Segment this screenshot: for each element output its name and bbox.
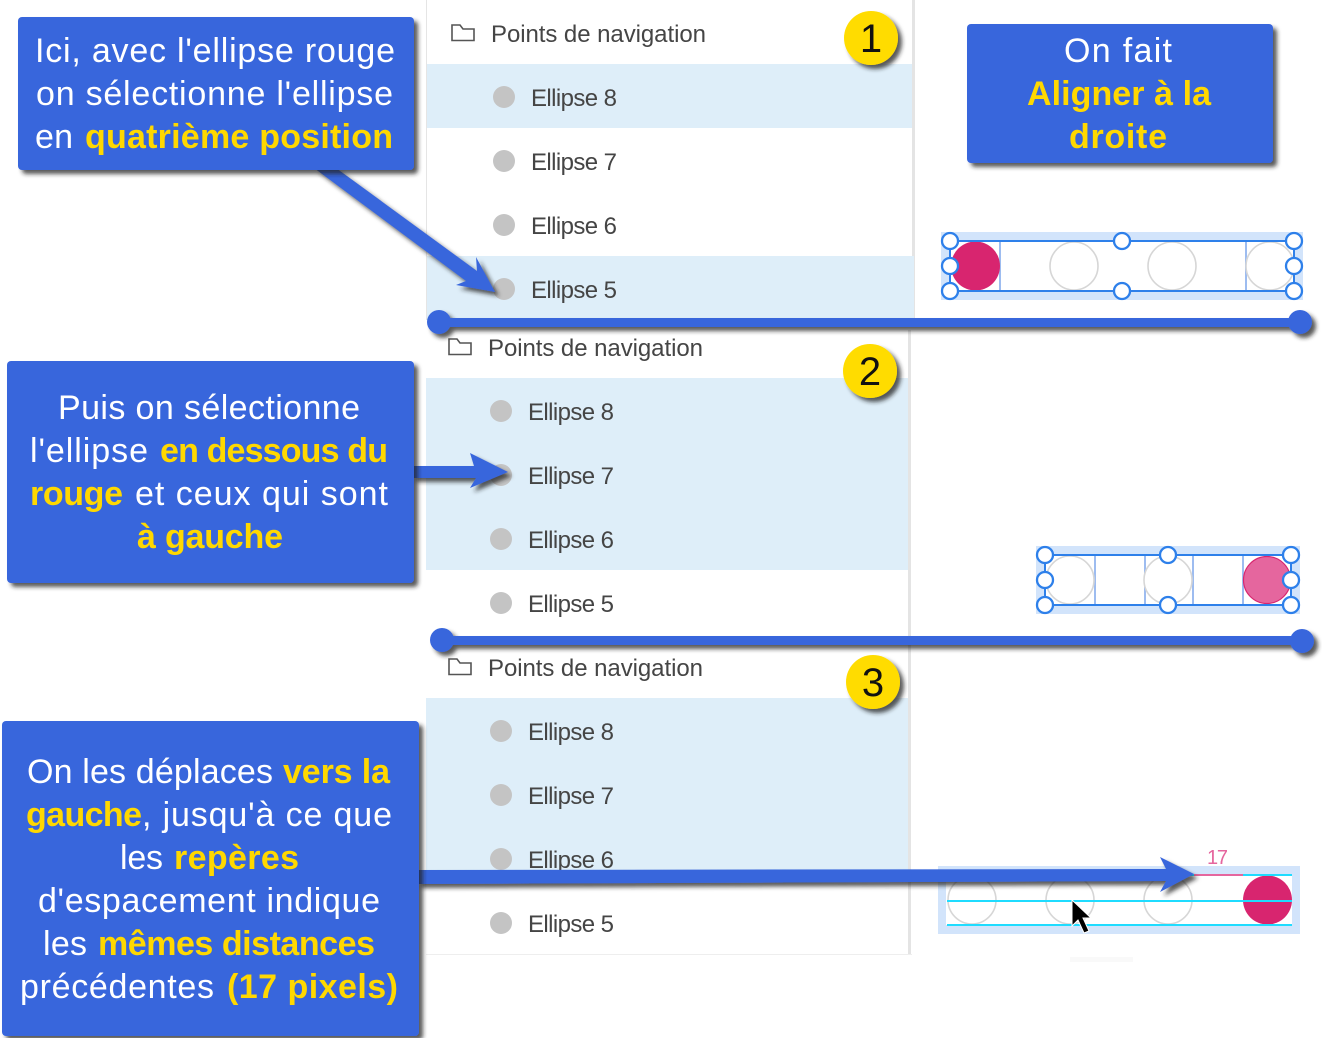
callout: align right <box>967 24 1273 163</box>
callout: step 2 text: Puis on sélectionne <box>58 389 360 427</box>
callout: step 3 text: repères <box>174 839 299 877</box>
row: Ellipse 5 <box>490 591 614 618</box>
callout: step 3 text: , jusqu'à ce que <box>142 796 392 834</box>
callout: step 1 text: quatrième position <box>85 118 393 156</box>
badge: step 3 <box>846 655 900 709</box>
arrow: to spacing guide <box>417 857 1194 892</box>
row: Ellipse 5 <box>493 277 617 304</box>
panel: navigation list 1 <box>426 0 915 322</box>
row: Ellipse 8: Ellipse 8 <box>528 719 614 746</box>
callout: align right: droite <box>1069 118 1167 156</box>
row: Ellipse 6 <box>490 527 614 554</box>
callout: step 3 text: les <box>120 839 163 877</box>
callout: step 3 text: précédentes <box>20 968 214 1006</box>
row: Ellipse 5: Ellipse 5 <box>528 591 614 618</box>
callout: step 2 text <box>7 361 414 583</box>
callout: step 3 text: les <box>43 925 87 963</box>
heading: list 1: Points de navigation <box>491 21 706 48</box>
row: Ellipse 7: Ellipse 7 <box>528 783 614 810</box>
row: Ellipse 7: Ellipse 7 <box>531 149 617 176</box>
callout: step 2 text: rouge <box>30 475 123 513</box>
callout: step 3 text: vers la <box>283 753 391 791</box>
row: Ellipse 5: Ellipse 5 <box>528 911 614 938</box>
badge: step 2: 2 <box>859 350 881 394</box>
row: Ellipse 6: Ellipse 6 <box>528 847 614 874</box>
badge: step 1: 1 <box>860 17 882 61</box>
row: Ellipse 6 <box>490 847 614 874</box>
icon: folder <box>449 659 471 674</box>
row: Ellipse 5 <box>490 911 614 938</box>
callout: step 2 text: en dessous du <box>160 432 388 470</box>
row: Ellipse 6: Ellipse 6 <box>528 527 614 554</box>
callout: step 3 text: On les déplaces <box>27 753 273 791</box>
row: Ellipse 8 <box>493 85 617 112</box>
callout: step 3 text: d'espacement indique <box>38 882 380 920</box>
row: Ellipse 7 <box>490 463 614 490</box>
row: Ellipse 7 <box>490 783 614 810</box>
row: Ellipse 8 <box>490 719 614 746</box>
row: Ellipse 7 <box>493 149 617 176</box>
row: Ellipse 6 <box>493 213 617 240</box>
callout: step 3 text: gauche <box>26 796 142 834</box>
widget: dragging with spacing guides <box>938 847 1300 962</box>
icon: mouse cursor <box>1072 900 1091 933</box>
arrow: to Ellipse 5 <box>314 168 495 292</box>
icon: folder <box>449 339 471 354</box>
callout: step 1 text: on sélectionne l'ellipse <box>36 75 393 113</box>
badge: step 3: 3 <box>862 661 884 705</box>
callout: step 1 text <box>18 17 414 170</box>
callout: step 2 text: à gauche <box>137 518 283 556</box>
arrow: to Ellipse 7 <box>412 453 508 488</box>
row: Ellipse 8: Ellipse 8 <box>528 399 614 426</box>
row: Ellipse 8: Ellipse 8 <box>531 85 617 112</box>
row: Ellipse 7: Ellipse 7 <box>528 463 614 490</box>
callout: align right: On fait <box>1064 32 1173 70</box>
row: Ellipse 6: Ellipse 6 <box>531 213 617 240</box>
heading: list 3: Points de navigation <box>488 655 703 682</box>
panel: navigation list 2 <box>426 330 911 640</box>
label: 17 pixels: 17 <box>1207 847 1228 869</box>
callout: step 3 text <box>2 721 419 1036</box>
callout: step 1 text: en <box>35 118 73 156</box>
icon: folder <box>452 25 474 40</box>
panel: navigation list 3 <box>426 645 912 955</box>
badge: step 1 <box>844 11 898 65</box>
widget: selection with pink ellipse on the right <box>1036 546 1300 614</box>
callout: step 1 text: Ici, avec l'ellipse rouge <box>35 32 395 70</box>
separator line 1 <box>427 310 1312 334</box>
heading: list 2: Points de navigation <box>488 335 703 362</box>
callout: align right: Aligner à la <box>1027 75 1212 113</box>
separator line 2 <box>430 628 1314 653</box>
badge: step 2 <box>843 344 897 398</box>
row: Ellipse 8 <box>490 399 614 426</box>
callout: step 2 text: et ceux qui sont <box>135 475 389 513</box>
widget: selection with red ellipse on the left <box>941 232 1303 300</box>
callout: step 3 text: mêmes distances <box>98 925 375 963</box>
callout: step 2 text: l'ellipse <box>30 432 148 470</box>
callout: step 3 text: (17 pixels) <box>227 968 398 1006</box>
row: Ellipse 5: Ellipse 5 <box>531 277 617 304</box>
